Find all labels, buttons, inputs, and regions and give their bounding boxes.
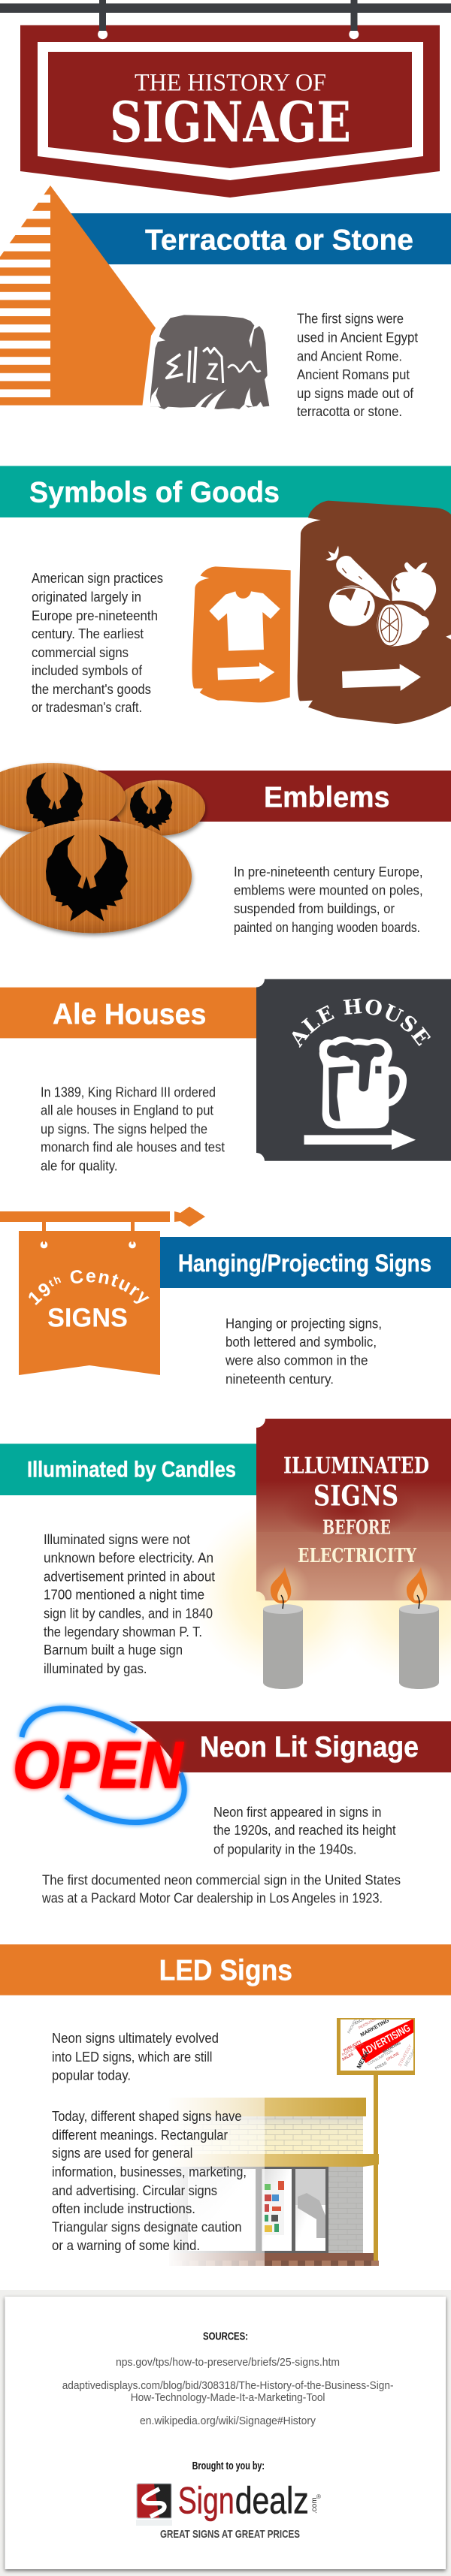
text block: Hanging or projecting signs, [226, 1317, 382, 1332]
text block: ale for quality. [41, 1158, 117, 1173]
text block: the legendary showman P. T. [44, 1624, 202, 1639]
white fade overlay [165, 2095, 265, 2268]
heading bar [0, 1443, 257, 1495]
text block: different meanings. Rectangular [52, 2128, 228, 2143]
ale house sign [256, 979, 451, 1161]
heading bar [0, 988, 257, 1038]
text block: were also common in the [225, 1353, 368, 1368]
heading: Terracotta or Stone [145, 225, 413, 257]
signdealz logo: .com [310, 2497, 319, 2514]
text block [52, 2109, 247, 2253]
text block: unknown before electricity. An [44, 1550, 213, 1565]
tagline: GREAT SIGNS AT GREAT PRICES [160, 2528, 300, 2541]
text block: nineteenth century. [226, 1371, 334, 1386]
text block: suspended from buildings, or [234, 901, 395, 916]
brown produce sign [298, 501, 451, 724]
signdealz logo: Sign [178, 2480, 235, 2522]
text block: popular today. [52, 2068, 131, 2083]
sign lettering: BEFORE [322, 1516, 391, 1539]
heading: Emblems [264, 782, 389, 814]
text block: illuminated by gas. [44, 1661, 147, 1676]
text block: the 1920s, and reached its height [213, 1823, 396, 1838]
text block: used in Ancient Egypt [297, 330, 418, 345]
section: illuminated by candles [0, 1419, 451, 1689]
text block: terracotta or stone. [297, 404, 402, 419]
section: led signs [0, 1944, 451, 2268]
text block: The first documented neon commercial sign in the United States [42, 1872, 401, 1887]
sources heading: SOURCES: [203, 2330, 248, 2343]
heading bar [129, 1721, 451, 1772]
heading bar [98, 771, 451, 822]
advertising billboard: ADVERTISING [359, 2022, 412, 2059]
text block: sign lit by candles, and in 1840 [44, 1606, 213, 1621]
section: emblems [0, 763, 451, 935]
sign lettering: th [48, 1277, 62, 1286]
text block: was at a Packard Motor Car dealership in Los Angeles in 1923. [41, 1890, 383, 1905]
text block: century. The earliest [32, 626, 144, 641]
text block: 1700 mentioned a night time [44, 1587, 204, 1602]
text block: Today, different shaped signs have [52, 2109, 242, 2124]
sign lettering: ELECTRICITY [298, 1545, 416, 1567]
sign lettering: ALE HOUSE [292, 998, 431, 1048]
text block: commercial signs [32, 645, 129, 660]
advertising billboard: MEDIA [356, 2050, 371, 2070]
text block [41, 1084, 225, 1173]
wooden emblem: small right [115, 780, 205, 836]
text block: The first signs were [297, 312, 404, 327]
candle left [263, 1567, 303, 1689]
text block: often include instructions. [52, 2201, 195, 2216]
orange pyramid [0, 186, 156, 406]
text block [297, 312, 418, 419]
section: terracotta or stone [0, 186, 451, 419]
title text: THE HISTORY OF [135, 69, 326, 96]
source links: adaptivedisplays.com/blog/bid/308318/The-History-of-the-Business-Sign- [62, 2379, 393, 2392]
heading: Ale Houses [53, 999, 206, 1031]
text block: both lettered and symbolic, [226, 1335, 377, 1350]
brought to you by: Brought to you by: [192, 2460, 265, 2472]
orange shirt sign [192, 566, 291, 702]
heading: LED Signs [159, 1955, 292, 1987]
text block: Triangular signs designate caution [52, 2220, 242, 2235]
text block [32, 571, 163, 715]
advertising billboard: MESSAGE [404, 2046, 419, 2068]
text block: of popularity in the 1940s. [213, 1842, 356, 1857]
text block: In 1389, King Richard III ordered [41, 1084, 216, 1099]
text block: Illuminated signs were not [44, 1532, 190, 1547]
text block: the merchant's goods [32, 682, 151, 697]
heading bar [60, 213, 451, 264]
text block: Europe pre-nineteenth [32, 608, 158, 623]
projecting pole with finial [0, 1206, 205, 1232]
sign lettering: 19 [29, 1283, 50, 1305]
text block: and Ancient Rome. [297, 348, 402, 363]
heading: Illuminated by Candles [27, 1457, 236, 1483]
shelves [262, 2181, 284, 2235]
text block: up signs made out of [297, 386, 414, 401]
source links [62, 2356, 393, 2427]
text block [225, 1317, 382, 1386]
section: ale houses [0, 979, 451, 1173]
source links: en.wikipedia.org/wiki/Signage#History [140, 2415, 316, 2427]
text block: American sign practices [32, 571, 163, 586]
section: symbols of goods [0, 466, 451, 724]
arrow [304, 1130, 416, 1150]
text block [44, 1532, 215, 1676]
footer panel [0, 2290, 451, 2576]
candle right [399, 1567, 439, 1689]
text block: into LED signs, which are still [52, 2050, 212, 2065]
neon open sign [13, 1709, 184, 1823]
advertising billboard: SALES [341, 2052, 355, 2062]
heading: Symbols of Goods [29, 477, 280, 509]
heading bar [0, 466, 451, 517]
advertising billboard: PROMOTION [347, 2012, 362, 2035]
storefront illustration [165, 2075, 379, 2268]
section: hanging/projecting signs [0, 1206, 451, 1386]
section: neon lit signage [13, 1709, 451, 1905]
text block: or a warning of some kind. [52, 2238, 200, 2253]
19th century hanging sign [19, 1231, 160, 1375]
text block [41, 1872, 401, 1905]
signdealz logo: dealz [235, 2480, 309, 2522]
text block: monarch find ale houses and test [41, 1140, 225, 1155]
title text: SIGNAGE [110, 90, 351, 155]
text block: included symbols of [32, 663, 143, 678]
advertising billboard: MARKETING [360, 2018, 391, 2038]
wooden emblem: large [0, 820, 192, 933]
text block: originated largely in [32, 590, 141, 605]
wooden emblem: top left [0, 763, 126, 834]
text block: Ancient Romans put [297, 367, 410, 382]
icon: beer mug [319, 1036, 407, 1129]
text block [213, 1805, 396, 1857]
advertising billboard: KNOWLEDGE [354, 2010, 378, 2026]
text block: In pre-nineteenth century Europe, [234, 864, 423, 879]
sign lettering: SIGNS [313, 1480, 398, 1513]
text block: signs are used for general [52, 2146, 192, 2161]
text block: painted on hanging wooden boards. [234, 920, 420, 935]
title text [110, 69, 351, 155]
advertising billboard: STRATEGY [398, 2044, 413, 2068]
text block [234, 864, 423, 935]
illuminated sign [256, 1419, 451, 1615]
text block: or tradesman's craft. [32, 700, 142, 715]
title sign [20, 0, 440, 198]
advertising billboard: PRESS [374, 2061, 388, 2071]
source links: How-Technology-Made-It-a-Marketing-Tool [131, 2391, 325, 2404]
advertising billboard: CONSUMPTION [367, 2049, 394, 2067]
advertising billboard: BRANDING [382, 2041, 402, 2055]
heading: Neon Lit Signage [200, 1731, 419, 1763]
sign lettering [283, 1453, 429, 1567]
text block: emblems were mounted on poles, [234, 882, 423, 897]
heading bar [0, 1944, 451, 1995]
heading bar [160, 1237, 451, 1288]
advertising billboard: POPULATION [341, 2042, 365, 2058]
advertising billboard: PERSUASION [358, 2014, 382, 2031]
neon open sign: OPEN [13, 1729, 184, 1802]
advertising billboard: ONLINE [386, 2051, 401, 2062]
signdealz logo [136, 2480, 321, 2541]
19th century hanging sign: SIGNS [47, 1304, 128, 1332]
text block: Neon signs ultimately evolved [52, 2031, 219, 2046]
text block: all ale houses in England to put [41, 1102, 213, 1118]
text block: information, businesses, marketing, [52, 2164, 247, 2179]
advertising billboard: PUBLICITY [343, 2039, 363, 2053]
text block: advertisement printed in about [44, 1569, 215, 1584]
icon: inscribed stone [150, 315, 269, 409]
text block: up signs. The signs helped the [41, 1121, 207, 1136]
text block: Neon first appeared in signs in [213, 1805, 382, 1820]
source links: nps.gov/tps/how-to-preserve/briefs/25-signs.htm [116, 2356, 340, 2369]
signdealz logo: ® [316, 2493, 321, 2500]
hanging rail [0, 3, 451, 13]
sign lettering: Century [71, 1270, 150, 1304]
text block: Barnum built a huge sign [44, 1642, 183, 1658]
candle glow on background [192, 1502, 451, 1682]
advertising billboard [337, 2018, 415, 2075]
text block [52, 2031, 219, 2083]
text block: and advertising. Circular signs [52, 2183, 217, 2198]
